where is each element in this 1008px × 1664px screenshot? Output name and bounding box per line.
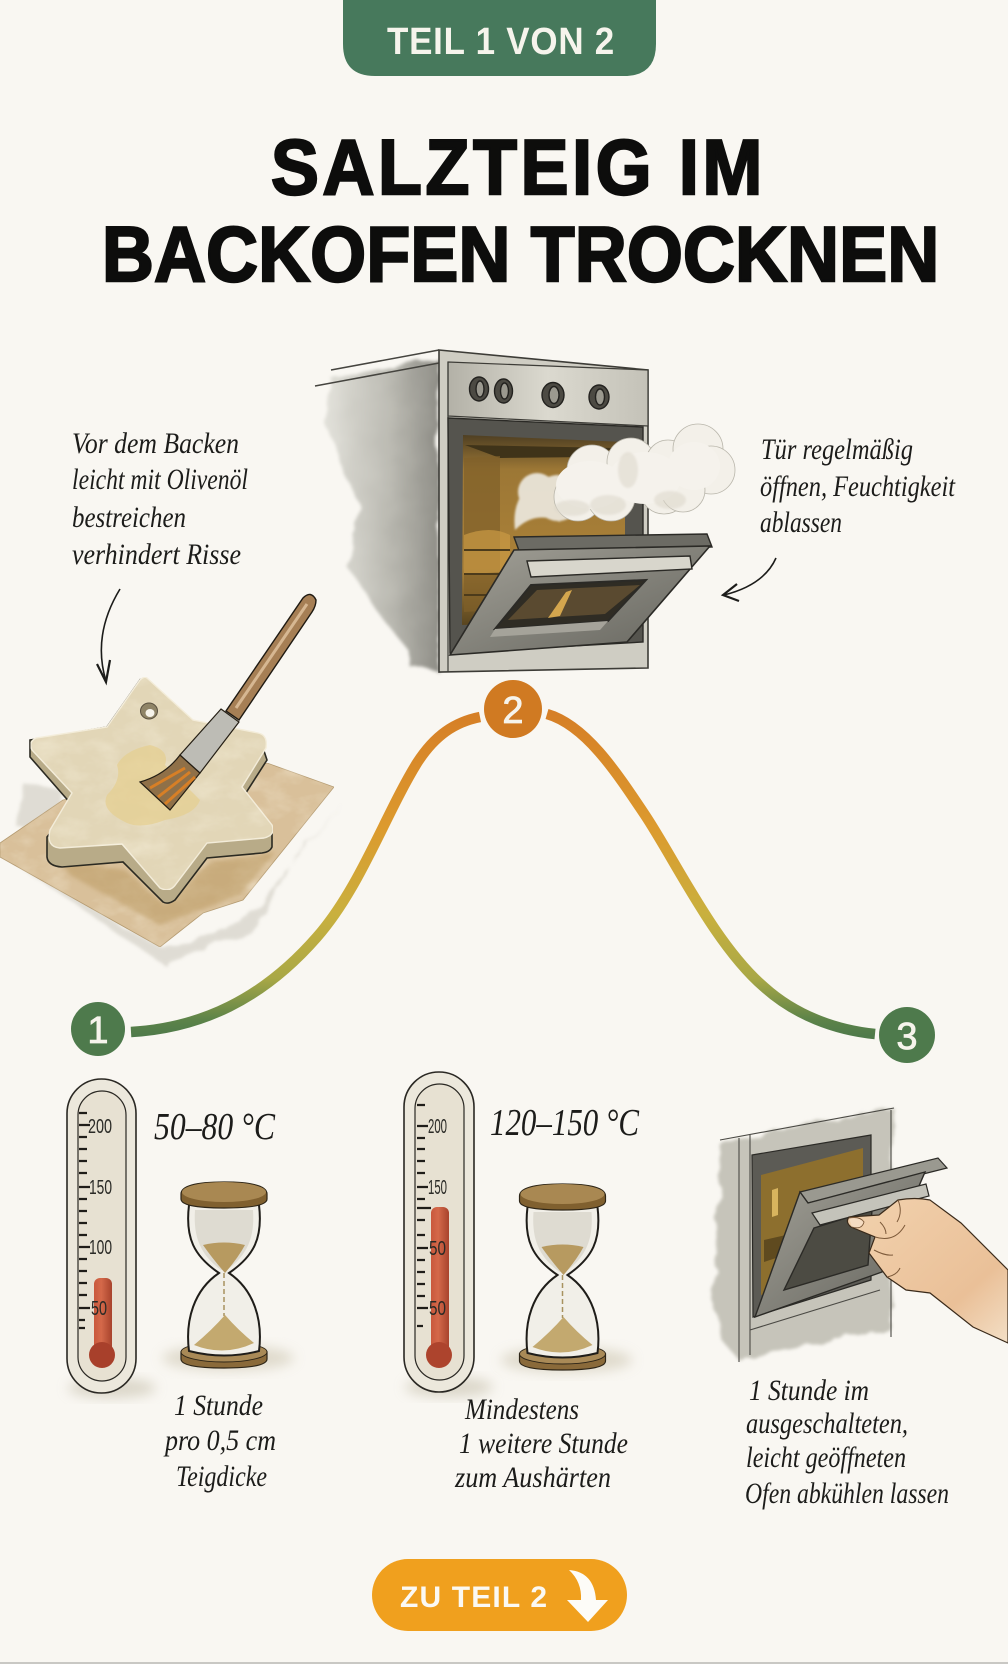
oven cavity: [448, 418, 643, 653]
title: [102, 123, 939, 298]
button: zu Teil 2: [372, 1559, 627, 1631]
thermometer 2: [404, 1072, 493, 1397]
caption: step 2: zum Aushärten: [454, 1461, 611, 1494]
brush ferrule: [180, 709, 239, 773]
star body: [30, 680, 272, 903]
caption: step 3: [745, 1374, 949, 1510]
annotation: olive oil tip: [72, 427, 248, 571]
steam cloud: [514, 424, 735, 530]
caption: step 3: Ofen abkühlen lassen: [745, 1477, 949, 1510]
star top face: [31, 677, 273, 890]
thermometer 1: [67, 1079, 156, 1398]
cavity frame: [752, 1135, 871, 1317]
icon: curved arrow: [567, 1570, 608, 1622]
thermometer 1: 150: [89, 1177, 112, 1199]
arrow: tip to door: [723, 558, 776, 601]
thermometer 2: 150: [428, 1177, 447, 1199]
thermometer 2: 50: [429, 1298, 446, 1320]
door handle: [527, 556, 692, 577]
hourglass 1: [162, 1182, 294, 1371]
annotation: olive oil tip: Vor dem Backen: [72, 427, 239, 460]
illustration: salt dough star with brush: [0, 594, 340, 965]
annotation: olive oil tip: leicht mit Olivenöl: [72, 463, 248, 496]
caption: step 3: leicht geöffneten: [746, 1441, 906, 1474]
caption: step 1: Teigdicke: [176, 1460, 267, 1493]
wall: [712, 1108, 894, 1360]
annotation: olive oil tip: bestreichen: [72, 501, 186, 534]
knobs: [470, 377, 609, 409]
annotation: olive oil tip: verhindert Risse: [72, 538, 241, 571]
caption: step 1: [163, 1389, 276, 1493]
step marker 1: 1: [87, 1010, 109, 1052]
caption: step 3: ausgeschalteten,: [746, 1407, 908, 1440]
thermometer 1: 200: [88, 1116, 112, 1138]
door: [800, 1158, 947, 1203]
step marker 3: [879, 1007, 935, 1063]
step marker 1: [71, 1002, 125, 1056]
oven front: [439, 350, 648, 672]
thermometer 1: 50: [91, 1298, 107, 1320]
step marker 3: 3: [896, 1016, 918, 1058]
open door: [514, 534, 712, 556]
caption: step 1: pro 0,5 cm: [163, 1424, 276, 1457]
caption: step 2: [454, 1393, 628, 1494]
annotation: open door tip: Tür regelmäßig: [761, 433, 913, 466]
step marker 2: 2: [502, 690, 524, 732]
caption: step 2: 1 weitere Stunde: [459, 1427, 628, 1460]
temperature curve: [131, 714, 875, 1034]
annotation: open door tip: [760, 433, 956, 539]
door handle: [812, 1184, 929, 1225]
caption: step 2: Mindestens: [464, 1393, 579, 1426]
thermometer 2: 200: [428, 1116, 447, 1138]
brush bristles: [140, 755, 200, 810]
hourglass 2: [500, 1184, 632, 1373]
badge: Teil 1 von 2: [343, 0, 656, 76]
title: SALZTEIG IM: [271, 123, 762, 211]
shadow: [10, 780, 340, 965]
temperature label 2: 120–150 °C: [490, 1102, 640, 1144]
arrow: tip to star: [97, 589, 120, 682]
oven side wash: [324, 358, 439, 672]
brush handle: [226, 594, 316, 720]
temperature label 1: 50–80 °C: [154, 1106, 276, 1148]
step marker 2: [484, 680, 542, 738]
title: BACKOFEN TROCKNEN: [102, 210, 939, 298]
annotation: open door tip: ablassen: [760, 506, 842, 539]
oil puddle: [105, 745, 200, 826]
caption: step 1: 1 Stunde: [174, 1389, 263, 1422]
hand: [847, 1198, 1008, 1343]
button: zu Teil 2: ZU TEIL 2: [400, 1581, 547, 1614]
illustration: hand opening oven door: [712, 1108, 1008, 1362]
annotation: open door tip: öffnen, Feuchtigkeit: [760, 470, 956, 503]
thermometer 1: 100: [89, 1237, 112, 1259]
illustration: oven with open door and steam: [315, 350, 735, 672]
caption: step 3: 1 Stunde im: [749, 1374, 869, 1407]
hanging hole: [140, 703, 158, 719]
baking paper: [0, 763, 334, 947]
badge: Teil 1 von 2: TEIL 1 VON 2: [387, 20, 614, 62]
thermometer 2: 50: [429, 1238, 446, 1260]
